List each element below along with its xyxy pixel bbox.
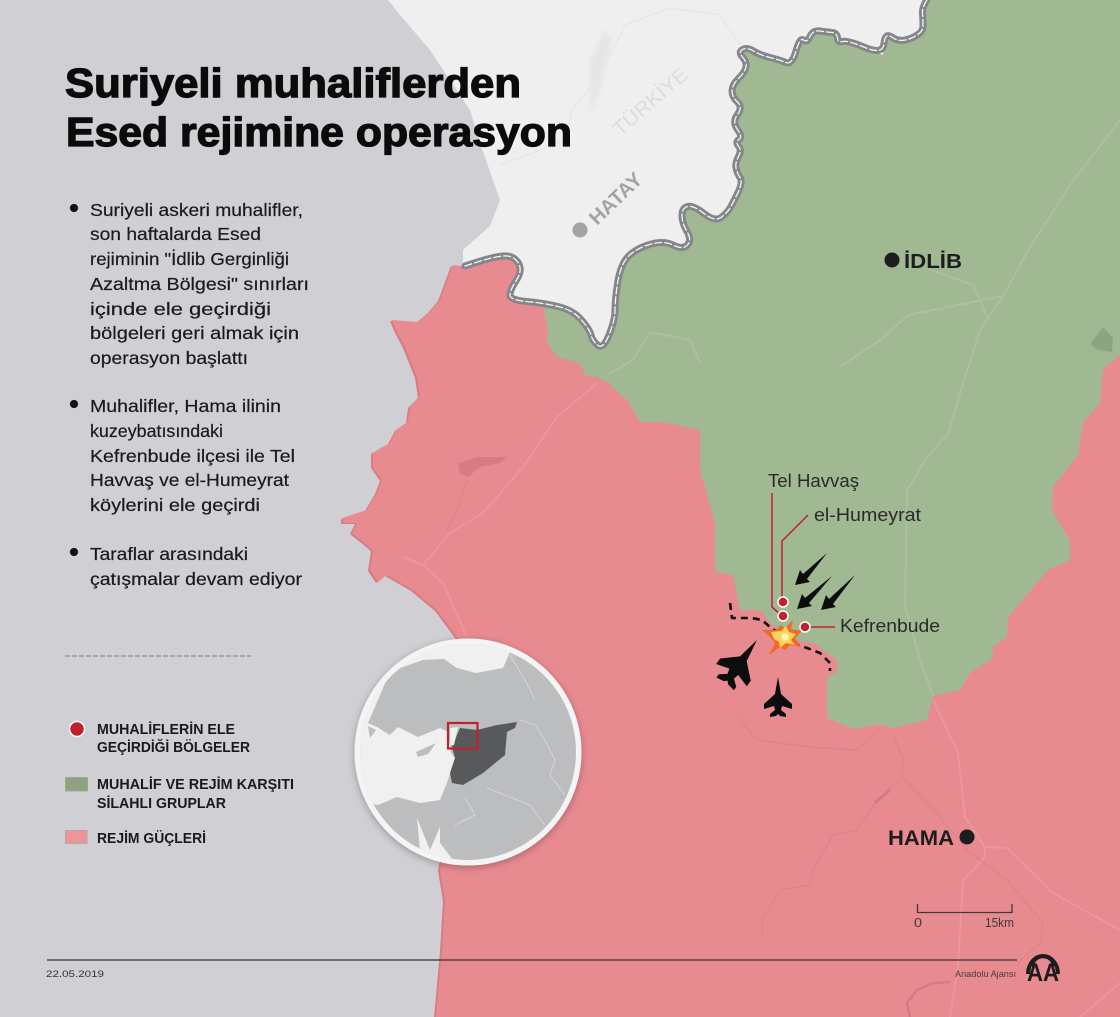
bullet text block 2	[70, 396, 295, 515]
callout: el-Humeyrat	[778, 505, 921, 607]
scale bar	[914, 904, 1014, 930]
legend item: captured areas: MUHALİFLERİN ELE	[97, 721, 235, 738]
map: opposition-held area	[543, 0, 1120, 729]
bullet text block 3: çatışmalar devam ediyor	[90, 569, 302, 589]
legend item: opposition groups: SİLAHLI GRUPLAR	[97, 795, 227, 812]
bullet text block 1: Azaltma Bölgesi" sınırları	[90, 274, 309, 294]
legend item: opposition groups	[66, 776, 294, 812]
icon: fighter jet 1	[710, 629, 772, 695]
bullet text block 1: son haftalarda Esed	[90, 224, 261, 244]
bullet text block 1: Suriyeli askeri muhalifler,	[90, 200, 303, 220]
callout: el-Humeyrat: el-Humeyrat	[814, 505, 921, 525]
bullet text block 2: köylerini ele geçirdi	[90, 495, 260, 515]
icon: attack arrow 3	[821, 575, 855, 610]
footer date: 22.05.2019	[46, 969, 104, 979]
map label: İDLİB: İDLİB	[904, 250, 962, 273]
bullet text block 1: rejiminin "İdlib Gerginliği	[90, 249, 289, 269]
title	[65, 60, 572, 155]
map label: HATAY: HATAY	[585, 168, 648, 230]
callout: Kefrenbude: Kefrenbude	[840, 616, 940, 636]
bullet text block 2: kuzeybatısındaki	[90, 421, 223, 441]
map: Türkiye land	[388, 0, 1120, 400]
icon: attack arrow 1	[795, 553, 827, 585]
bullet text block 1: operasyon başlattı	[90, 348, 248, 368]
callout: Tel Havvaş	[768, 471, 859, 621]
scale bar: 0	[914, 916, 922, 930]
bullet text block 1	[70, 200, 309, 368]
bullet text block 3: Taraflar arasındaki	[90, 544, 248, 564]
bullet text block 2: Kefrenbude ilçesi ile Tel	[90, 446, 295, 466]
map label: İDLİB	[884, 250, 962, 273]
legend item: opposition groups: MUHALİF VE REJİM KARŞITI	[97, 776, 294, 793]
legend item: regime forces: REJİM GÜÇLERİ	[97, 830, 206, 847]
map label: HAMA: HAMA	[888, 827, 954, 850]
map: international border	[465, 0, 927, 346]
locator globe	[350, 630, 590, 870]
title: Suriyeli muhaliflerden	[65, 60, 521, 106]
scale bar: 15km	[985, 916, 1014, 930]
map label: TÜRKİYE: TÜRKİYE	[608, 63, 693, 141]
icon: explosion	[762, 620, 802, 655]
title: Esed rejimine operasyon	[66, 109, 572, 155]
legend	[66, 721, 294, 847]
icon: attack arrow 2	[797, 576, 832, 609]
icon: fighter jet 2	[764, 677, 792, 717]
legend item: captured areas: GEÇİRDİĞİ BÖLGELER	[97, 738, 250, 756]
front line	[730, 603, 830, 671]
bullet text block 1: bölgeleri geri almak için	[90, 323, 299, 343]
callout: Tel Havvaş: Tel Havvaş	[768, 471, 859, 491]
logo: AA: AA	[1027, 959, 1059, 987]
bullet text block 2: Muhalifler, Hama ilinin	[90, 396, 281, 416]
footer agency name: Anadolu Ajansı	[955, 969, 1016, 980]
bullet text block 3	[70, 544, 302, 589]
callout: Kefrenbude	[800, 616, 940, 636]
bullet text block 2: Havvaş ve el-Humeyrat	[90, 470, 289, 490]
map: regime forces area	[341, 255, 1120, 1017]
bullet text block 1: içinde ele geçirdiği	[90, 299, 271, 319]
legend item: captured areas	[70, 721, 250, 756]
